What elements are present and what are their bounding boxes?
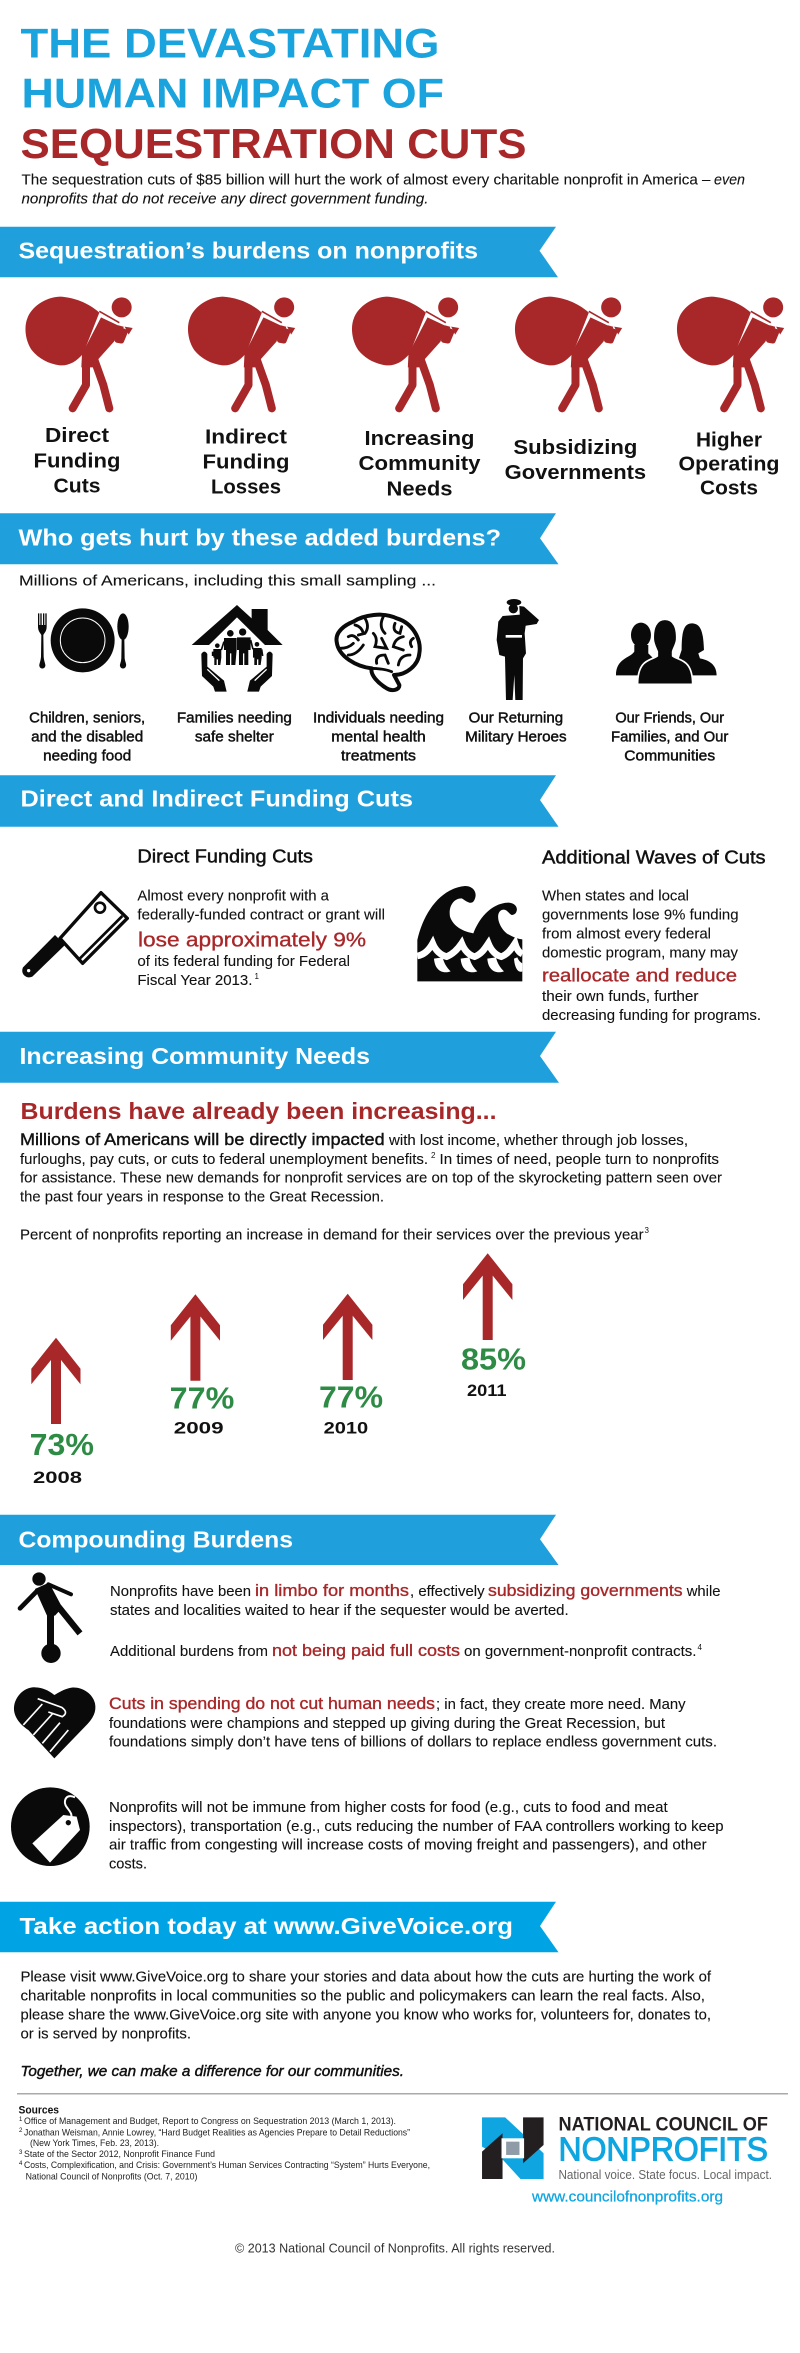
banner: compounding burdens: Compounding Burdens <box>18 1526 293 1552</box>
human needs text: foundations simply don’t have tens of billions of dollars to replace endless government cuts. <box>109 1734 717 1751</box>
logo: national council of nonprofits <box>482 2115 772 2182</box>
icon: brain <box>336 615 420 690</box>
burden: indirect funding losses: Indirect <box>205 426 287 448</box>
full costs text: not being paid full costs <box>272 1642 460 1660</box>
higher costs text: Nonprofits will not be immune from higher costs for food (e.g., cuts to food and meat <box>109 1799 669 1816</box>
call to action paragraph: Please visit www.GiveVoice.org to share your stories and data about how the cuts are hurting the work of <box>20 1969 712 1986</box>
sources: 2 <box>19 2128 23 2134</box>
arrow: 2008: 73% <box>30 1427 94 1462</box>
call to action paragraph: or is served by nonprofits. <box>20 2025 191 2042</box>
burden: higher operating costs: Operating <box>678 454 780 476</box>
banner: who gets hurt <box>0 513 558 564</box>
sources <box>18 2104 430 2182</box>
population labels: and the disabled <box>31 730 143 746</box>
sampling intro: Millions of Americans, including this small sampling ... <box>19 572 436 589</box>
title: THE DEVASTATING <box>20 19 440 66</box>
arrow: 2010: 77% <box>319 1379 383 1414</box>
human needs text: foundations were champions and stepped up giving during the Great Recession, but <box>109 1715 666 1732</box>
title <box>20 19 526 167</box>
additional waves of cuts text: governments lose 9% funding <box>542 907 738 924</box>
additional waves of cuts text: reallocate and reduce <box>542 966 737 986</box>
copyright: © 2013 National Council of Nonprofits. All rights reserved. <box>235 2240 555 2255</box>
heading: burdens increasing: Burdens have already been increasing... <box>20 1098 496 1124</box>
banner: take action <box>0 1902 558 1952</box>
burden: indirect funding losses: Losses <box>211 477 281 499</box>
community needs paragraph <box>20 1131 722 1206</box>
community needs paragraph: furloughs, pay cuts, or cuts to federal unemployment benefits. <box>20 1151 428 1168</box>
logo: national council of nonprofits: NATIONAL COUNCIL OF <box>558 2115 768 2136</box>
additional waves of cuts text: their own funds, further <box>542 988 698 1005</box>
population labels: treatments <box>341 748 416 764</box>
population labels: mental health <box>331 730 426 746</box>
icon: figure balancing on ball <box>20 1572 80 1663</box>
logo: national council of nonprofits: National voice. State focus. Local impact. <box>558 2168 772 2182</box>
arrow: 2011: 2011 <box>467 1382 506 1400</box>
icon: family in sheltered house <box>192 605 283 692</box>
sources: National Council of Nonprofits (Oct. 7, 2010) <box>26 2171 197 2182</box>
limbo text: in limbo for months <box>255 1582 409 1600</box>
burden: subsidizing governments: Governments <box>505 462 646 484</box>
arrow: 2010 <box>319 1294 383 1438</box>
arrow chart <box>30 1253 526 1487</box>
additional waves of cuts text: decreasing funding for programs. <box>542 1007 761 1024</box>
population labels: Our Returning <box>469 711 563 727</box>
call to action paragraph: charitable nonprofits in local communities so the public and policymakers can learn the real facts. Also, <box>20 1988 705 2005</box>
population labels: Children, seniors, <box>29 711 145 727</box>
community needs paragraph: with lost income, whether through job losses, <box>388 1132 688 1149</box>
community needs paragraph: 2 <box>431 1151 436 1160</box>
arrow: 2008: 2008 <box>33 1469 82 1487</box>
icon: cleaver <box>22 893 127 977</box>
banner: direct and indirect funding cuts <box>0 775 558 827</box>
direct funding cuts text: federally-funded contract or grant will <box>137 906 385 923</box>
direct funding cuts text: Direct Funding Cuts <box>137 847 313 867</box>
sources: 3 <box>19 2150 23 2156</box>
sources: Costs, Complexification, and Crisis: Government’s Human Services Contracting “System” Hurts Everyone, <box>24 2160 430 2171</box>
full costs text: on government-nonprofit contracts. <box>464 1643 696 1660</box>
burden: higher operating costs: Higher <box>696 430 762 452</box>
additional waves of cuts text: from almost every federal <box>542 925 711 942</box>
burden: increasing community needs: Community <box>358 453 481 475</box>
banner: compounding burdens <box>0 1515 558 1565</box>
higher costs text <box>109 1799 724 1873</box>
population labels: Families, and Our <box>611 730 729 746</box>
direct funding cuts text: Fiscal Year 2013. <box>137 972 252 989</box>
population labels <box>29 711 729 764</box>
closing line: Together, we can make a difference for our communities. <box>20 2063 404 2080</box>
icon: saluting soldier <box>497 599 539 700</box>
icon: price tag in circle <box>11 1787 90 1866</box>
limbo text: Nonprofits have been <box>110 1583 251 1600</box>
sources: Office of Management and Budget, Report to Congress on Sequestration 2013 (March 1, 2013). <box>24 2116 396 2127</box>
arrow: 2011: 85% <box>461 1341 526 1376</box>
full costs text <box>110 1642 702 1660</box>
intro text: even <box>714 171 745 188</box>
community needs paragraph: for assistance. These new demands for nonprofit services are on top of the skyrocketing pattern seen over <box>20 1170 722 1187</box>
banner: who gets hurt: Who gets hurt by these added burdens? <box>18 525 501 551</box>
human needs text: ; in fact, they create more need. Many <box>436 1696 686 1713</box>
icon: waves <box>417 886 522 981</box>
burden: increasing community needs: Needs <box>386 478 452 500</box>
logo: national council of nonprofits: NONPROFITS <box>558 2131 768 2168</box>
population labels: Our Friends, Our <box>615 711 724 727</box>
direct funding cuts text: Almost every nonprofit with a <box>137 887 330 904</box>
population labels: Families needing <box>177 711 292 727</box>
icon: plate and cutlery <box>38 608 129 672</box>
population labels: needing food <box>43 748 131 764</box>
population labels: Individuals needing <box>313 711 444 727</box>
banner: increasing community needs: Increasing Community Needs <box>20 1043 370 1069</box>
banner: burdens on nonprofits: Sequestration’s burdens on nonprofits <box>18 237 478 263</box>
community needs paragraph: the past four years in response to the Great Recession. <box>20 1189 384 1206</box>
burden: increasing community needs: Increasing <box>364 428 474 450</box>
sources: State of the Sector 2012, Nonprofit Finance Fund <box>24 2149 215 2160</box>
burden: higher operating costs <box>677 297 784 500</box>
full costs text: 4 <box>698 1643 702 1652</box>
banner: direct and indirect funding cuts: Direct and Indirect Funding Cuts <box>20 786 413 812</box>
website link: www.councilofnonprofits.org <box>531 2189 723 2206</box>
banner: burdens on nonprofits <box>0 227 558 277</box>
sources: 1 <box>19 2117 23 2123</box>
burden: subsidizing governments: Subsidizing <box>513 437 637 459</box>
population labels: safe shelter <box>195 730 274 746</box>
burden: direct funding cuts: Direct <box>45 425 109 447</box>
chart caption: Percent of nonprofits reporting an increase in demand for their services over the previous year <box>20 1226 644 1243</box>
population labels: Communities <box>624 748 715 764</box>
chart caption: 3 <box>644 1226 650 1235</box>
arrow: 2008 <box>30 1338 94 1487</box>
intro text: nonprofits that do not receive any direct government funding. <box>22 190 428 207</box>
banner: take action: Take action today at www.GiveVoice.org <box>20 1913 513 1939</box>
higher costs text: air traffic from congesting will increase costs of moving freight and passengers), and other <box>109 1837 707 1854</box>
arrow: 2009: 77% <box>170 1380 234 1415</box>
limbo text: subsidizing governments <box>488 1582 683 1600</box>
burden: direct funding cuts <box>25 297 133 497</box>
sources: Sources <box>18 2104 59 2116</box>
direct funding cuts text: of its federal funding for Federal <box>137 953 350 970</box>
sources: 4 <box>19 2161 23 2167</box>
burden: subsidizing governments <box>505 297 646 484</box>
higher costs text: inspectors), transportation (e.g., cuts reducing the number of FAA controllers working to keep <box>109 1818 724 1835</box>
human needs text <box>109 1695 717 1751</box>
burden: direct funding cuts: Funding <box>34 450 120 472</box>
arrow: 2010: 2010 <box>324 1420 368 1438</box>
human needs text: Cuts in spending do not cut human needs <box>109 1695 435 1713</box>
arrow: 2009: 2009 <box>174 1419 224 1437</box>
call to action paragraph <box>20 1969 712 2042</box>
burden: higher operating costs: Costs <box>700 478 758 500</box>
additional waves of cuts text: Additional Waves of Cuts <box>542 847 766 867</box>
sources: Jonathan Weisman, Annie Lowrey, “Hard Budget Realities as Agencies Prepare to Detail Reductions” <box>24 2127 410 2138</box>
title: HUMAN IMPACT OF <box>22 69 444 116</box>
sources: (New York Times, Feb. 23, 2013). <box>30 2138 159 2149</box>
icon: heart handshake <box>14 1687 95 1758</box>
arrow: 2009 <box>170 1294 234 1437</box>
banner: increasing community needs <box>0 1032 559 1083</box>
full costs text: Additional burdens from <box>110 1643 268 1660</box>
burden: increasing community needs <box>352 297 481 500</box>
limbo text: while <box>686 1583 720 1600</box>
limbo text: states and localities waited to hear if the sequester would be averted. <box>110 1602 569 1619</box>
intro text: The sequestration cuts of $85 billion will hurt the work of almost every charitable nonprofit in America – <box>22 171 711 188</box>
arrow: 2011 <box>461 1253 526 1400</box>
burden: indirect funding losses: Funding <box>202 452 290 474</box>
icon: group of people <box>616 619 717 684</box>
direct funding cuts text: lose approximately 9% <box>138 929 366 952</box>
limbo text <box>110 1582 720 1619</box>
limbo text: , effectively <box>410 1583 485 1600</box>
population labels: Military Heroes <box>465 730 567 746</box>
additional waves of cuts text: domestic program, many may <box>542 944 738 961</box>
logo mark <box>482 2117 544 2179</box>
call to action paragraph: please share the www.GiveVoice.org site with anyone you know who works for, volunteers for, donates to, <box>20 2006 711 2023</box>
intro text <box>22 171 745 207</box>
direct funding cuts text: 1 <box>254 972 260 981</box>
burden: direct funding cuts: Cuts <box>54 475 100 497</box>
community needs paragraph: In times of need, people turn to nonprofits <box>440 1151 719 1168</box>
title: SEQUESTRATION CUTS <box>20 120 526 167</box>
higher costs text: costs. <box>109 1856 147 1873</box>
additional waves of cuts text <box>542 847 766 1024</box>
direct funding cuts text <box>137 847 385 989</box>
burden: indirect funding losses <box>188 297 295 499</box>
additional waves of cuts text: When states and local <box>542 888 689 905</box>
community needs paragraph: Millions of Americans will be directly impacted <box>20 1131 385 1149</box>
